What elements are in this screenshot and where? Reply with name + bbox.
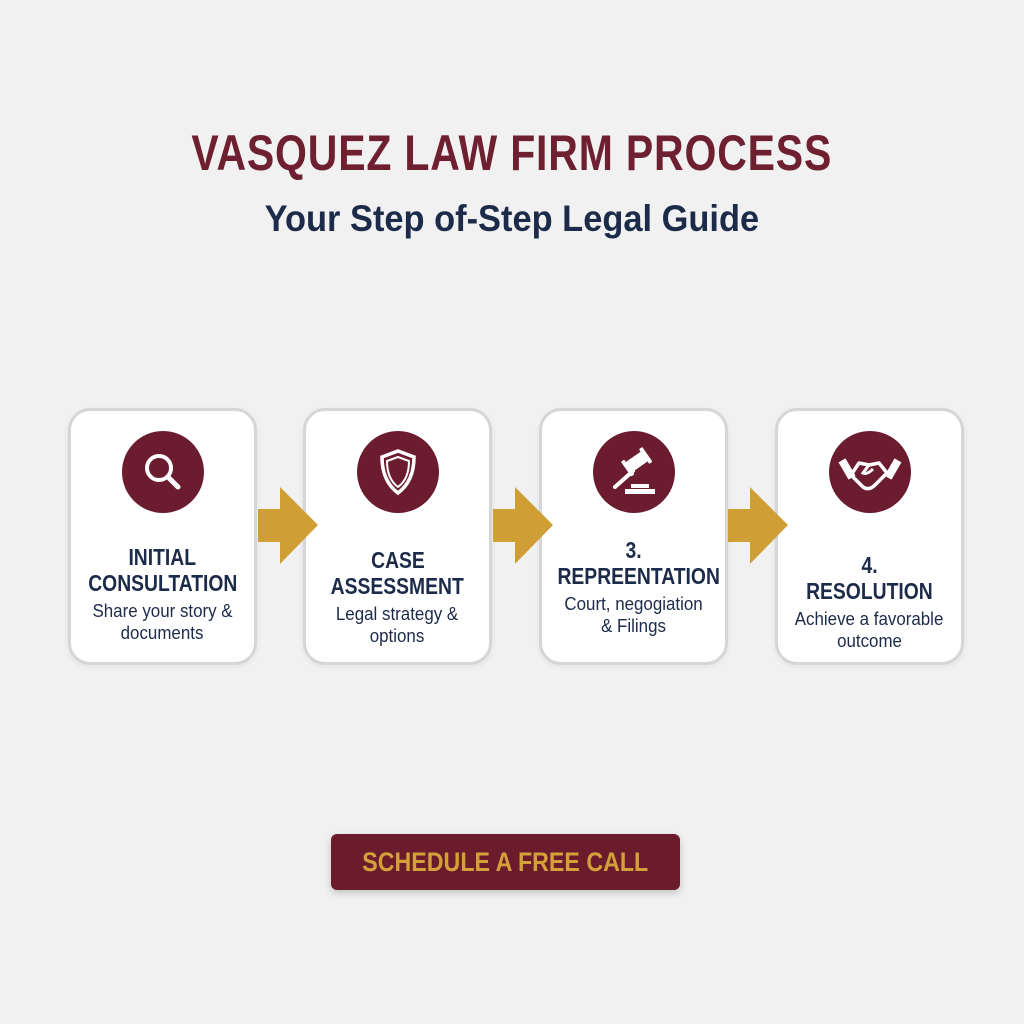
text: step 3: & Filings [601,616,666,636]
text: step 1 [88,544,237,643]
button: schedule call: SCHEDULE A FREE CALL [363,847,648,877]
panel: step 3 [539,408,728,665]
panel: step 2 [303,408,492,665]
text: step 3: Court, negogiation [564,594,703,614]
panel: step 1 [68,408,257,665]
text: step 4: outcome [837,631,902,651]
panel: step 4 [775,408,964,665]
text: step 2: Legal strategy & [336,604,459,624]
arrow 1 [258,487,318,564]
text: step 2: options [370,626,425,646]
text: step 2: ASSESSMENT [331,573,464,599]
text: step 4 [794,552,944,651]
icon: handshake [828,431,910,513]
text: step 3: REPREENTATION [557,563,720,589]
text: step 1: INITIAL [129,544,196,570]
arrow 2 [493,487,553,564]
icon: gavel [592,431,674,513]
arrow 3 [728,487,788,564]
text: step 2: CASE [371,547,424,573]
text: step 3: 3. [625,537,642,563]
text: step 4: Achieve a favorable [795,609,944,629]
button: schedule call [331,834,680,890]
text: step 1: CONSULTATION [88,570,237,596]
title: VASQUEZ LAW FIRM PROCESS [192,125,832,181]
text: step 1: Share your story & [92,601,233,621]
icon: magnifier [122,431,204,513]
text: step 2 [331,547,464,646]
text: step 4: 4. [861,552,878,578]
subtitle: Your Step of-Step Legal Guide [265,198,759,239]
icon: shield [356,431,438,513]
text: step 3 [557,537,720,636]
text: step 4: RESOLUTION [806,578,933,604]
text: step 1: documents [121,623,204,643]
